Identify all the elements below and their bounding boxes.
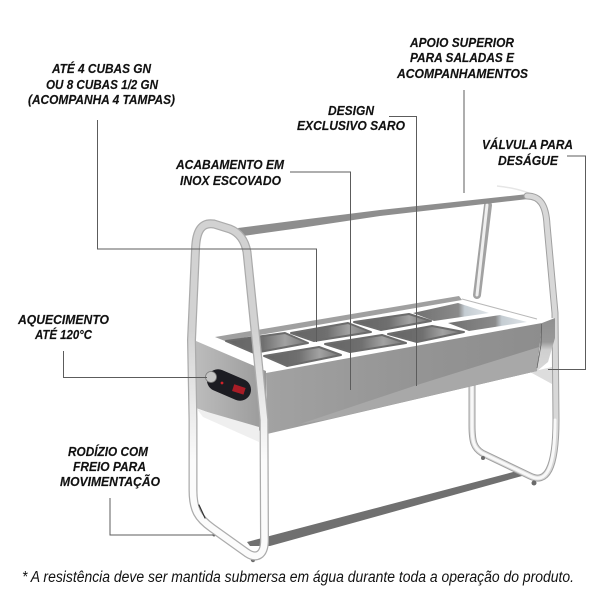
leader: apoio superior	[463, 90, 465, 193]
label: cubas: (ACOMPANHA 4 TAMPAS)	[28, 92, 175, 107]
tank right end	[537, 318, 555, 371]
label: apoio superior: APOIO SUPERIOR	[409, 35, 515, 50]
label: design: DESIGN	[328, 103, 375, 118]
label: aquecimento	[17, 312, 109, 342]
rear bottom bar	[247, 471, 522, 546]
leader: cubas	[98, 120, 316, 342]
label: rodízio: FREIO PARA	[73, 459, 146, 474]
leader: design	[389, 116, 416, 386]
white strip under side panel	[197, 409, 259, 442]
leader: aquecimento	[64, 351, 207, 378]
right frame rear tube	[477, 205, 488, 295]
leader lines	[64, 90, 586, 535]
label: rodízio	[60, 444, 160, 489]
leader: acabamento	[290, 172, 350, 390]
label: apoio superior	[396, 35, 528, 81]
label: rodízio: RODÍZIO COM	[68, 444, 149, 459]
label: aquecimento: AQUECIMENTO	[17, 312, 109, 327]
label: apoio superior: ACOMPANHAMENTOS	[396, 66, 528, 81]
label: design	[297, 103, 405, 133]
wells	[226, 303, 527, 366]
control panel	[204, 366, 254, 404]
product: food counter	[192, 186, 556, 562]
label: válvula	[482, 137, 573, 168]
tank front panel	[266, 323, 542, 434]
label: apoio superior: PARA SALADAS E	[410, 50, 514, 65]
label: válvula: VÁLVULA PARA	[482, 137, 573, 152]
upper support bar	[238, 194, 528, 236]
lighter lower band of front panel	[300, 347, 539, 424]
leader: válvula	[548, 156, 586, 370]
tank top rim	[196, 297, 555, 373]
tank rear wall	[215, 296, 462, 341]
red display	[232, 384, 246, 395]
label: cubas: OU 8 CUBAS 1/2 GN	[46, 77, 159, 92]
rim line on right edge	[462, 299, 537, 319]
label: válvula: DESÁGUE	[498, 153, 558, 168]
faint highlight of the top arc	[497, 186, 538, 198]
label: design: EXCLUSIVO SARO	[297, 118, 405, 133]
label: acabamento: INOX ESCOVADO	[180, 173, 281, 188]
right frame tube	[472, 196, 556, 478]
temperature knob	[206, 372, 216, 382]
label: cubas	[28, 61, 175, 107]
label: acabamento: ACABAMENTO EM	[175, 157, 285, 172]
casters	[212, 456, 536, 562]
label: aquecimento: ATÉ 120°C	[34, 327, 93, 342]
tank side panel	[196, 341, 266, 433]
label: acabamento	[175, 157, 285, 188]
leader: rodízio	[110, 498, 213, 535]
valve	[530, 367, 552, 384]
indicator light	[221, 382, 223, 384]
seam on right end	[537, 324, 542, 368]
label: rodízio: MOVIMENTAÇÃO	[60, 474, 160, 489]
label: cubas: ATÉ 4 CUBAS GN	[51, 61, 152, 76]
left frame tube	[192, 224, 264, 556]
